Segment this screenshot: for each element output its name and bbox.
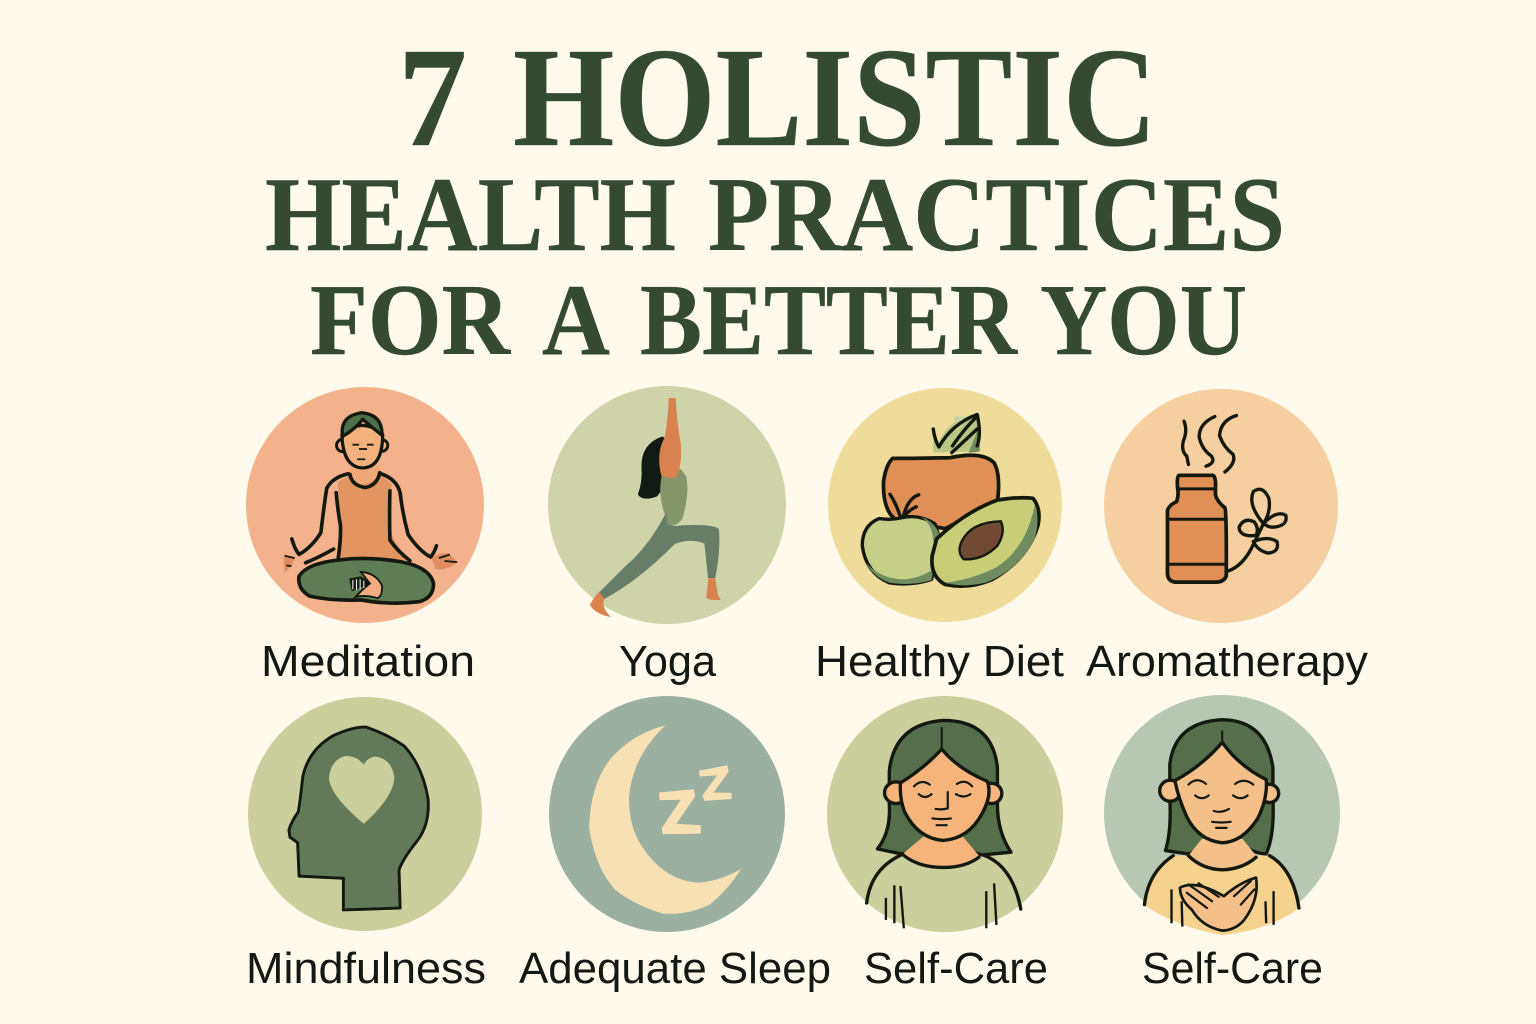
panel: aromatherapy: [1104, 389, 1338, 623]
diet circle: [828, 388, 1062, 622]
icon: essential oil bottle and sprig: [1167, 415, 1286, 582]
icon: crescent moon and zzz: [589, 725, 741, 914]
label: Meditation: Meditation: [261, 637, 475, 686]
label: Yoga: Yoga: [619, 637, 717, 686]
label: Healthy Diet: Healthy Diet: [815, 637, 1064, 686]
panel: self-care 2: [1104, 695, 1340, 935]
mindfulness circle: [248, 697, 482, 931]
hands on chest: [1180, 878, 1257, 931]
label: Self-Care: Self-Care: [1142, 944, 1323, 993]
title: HOLISTIC: [513, 18, 1157, 176]
title: HEALTH: [265, 156, 676, 273]
aromatherapy circle: [1104, 389, 1338, 623]
icon: warrior pose figure: [590, 398, 721, 617]
label: Aromatherapy: Aromatherapy: [1086, 637, 1368, 686]
title: FOR: [310, 264, 511, 377]
label: Mindfulness: Mindfulness: [246, 944, 486, 993]
label: Adequate Sleep: Adequate Sleep: [519, 944, 831, 993]
yoga circle: [548, 386, 786, 624]
title: A: [542, 264, 610, 377]
panel: meditation: [246, 387, 484, 623]
title: [265, 18, 1285, 377]
panel: adequate sleep: [549, 696, 785, 932]
icon: head with heart: [289, 727, 428, 910]
self-care circle 1: [827, 696, 1063, 932]
panel: yoga: [548, 386, 786, 624]
meditation circle: [246, 387, 484, 623]
panel: healthy diet: [828, 388, 1062, 622]
sleep circle: [549, 696, 785, 932]
title: BETTER: [640, 264, 1018, 377]
icon: smiling woman: [867, 720, 1021, 928]
title: PRACTICES: [708, 156, 1285, 273]
icon: woman hands on heart: [1144, 720, 1299, 935]
icon: meditating person: [284, 413, 457, 603]
panel: self-care 1: [827, 696, 1063, 932]
title: YOU: [1040, 264, 1247, 377]
icon: apple pear avocado: [862, 414, 1039, 586]
panel: mindfulness: [248, 697, 482, 931]
heart: [329, 756, 394, 824]
self-care circle 2: [1104, 695, 1340, 931]
label: Self-Care: Self-Care: [864, 944, 1048, 993]
title: 7: [398, 18, 467, 176]
